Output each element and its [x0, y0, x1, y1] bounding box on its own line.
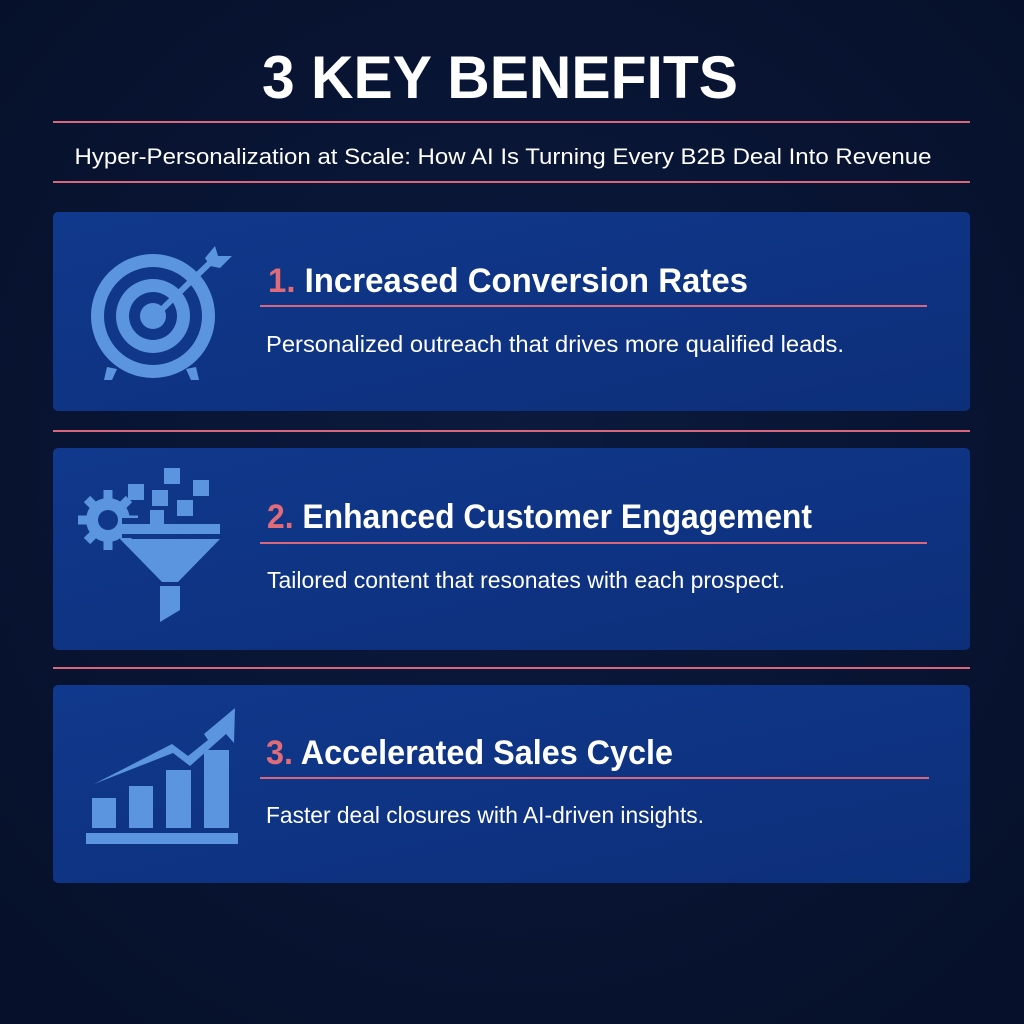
icon: target: [91, 246, 232, 380]
description 1: Personalized outreach that drives more qualified leads.: [266, 331, 844, 357]
panel: accelerated sales cycle: [53, 685, 970, 883]
subtitle: Hyper-Personalization at Scale: How AI Is Turning Every B2B Deal Into Revenue: [74, 144, 932, 169]
heading 2: 2. Enhanced Customer Engagement: [267, 498, 812, 536]
description 2: Tailored content that resonates with each prospect.: [267, 567, 785, 593]
panel: enhanced customer engagement: [53, 448, 970, 650]
icon: bar chart: [86, 708, 238, 844]
heading 1: 1. Increased Conversion Rates: [268, 262, 748, 300]
description 3: Faster deal closures with AI-driven insights.: [266, 802, 704, 828]
title: 3 KEY BENEFITS: [262, 44, 738, 111]
heading 3: 3. Accelerated Sales Cycle: [266, 734, 673, 772]
icon: gear funnel: [78, 468, 220, 622]
panel: increased conversion rates: [53, 212, 970, 411]
